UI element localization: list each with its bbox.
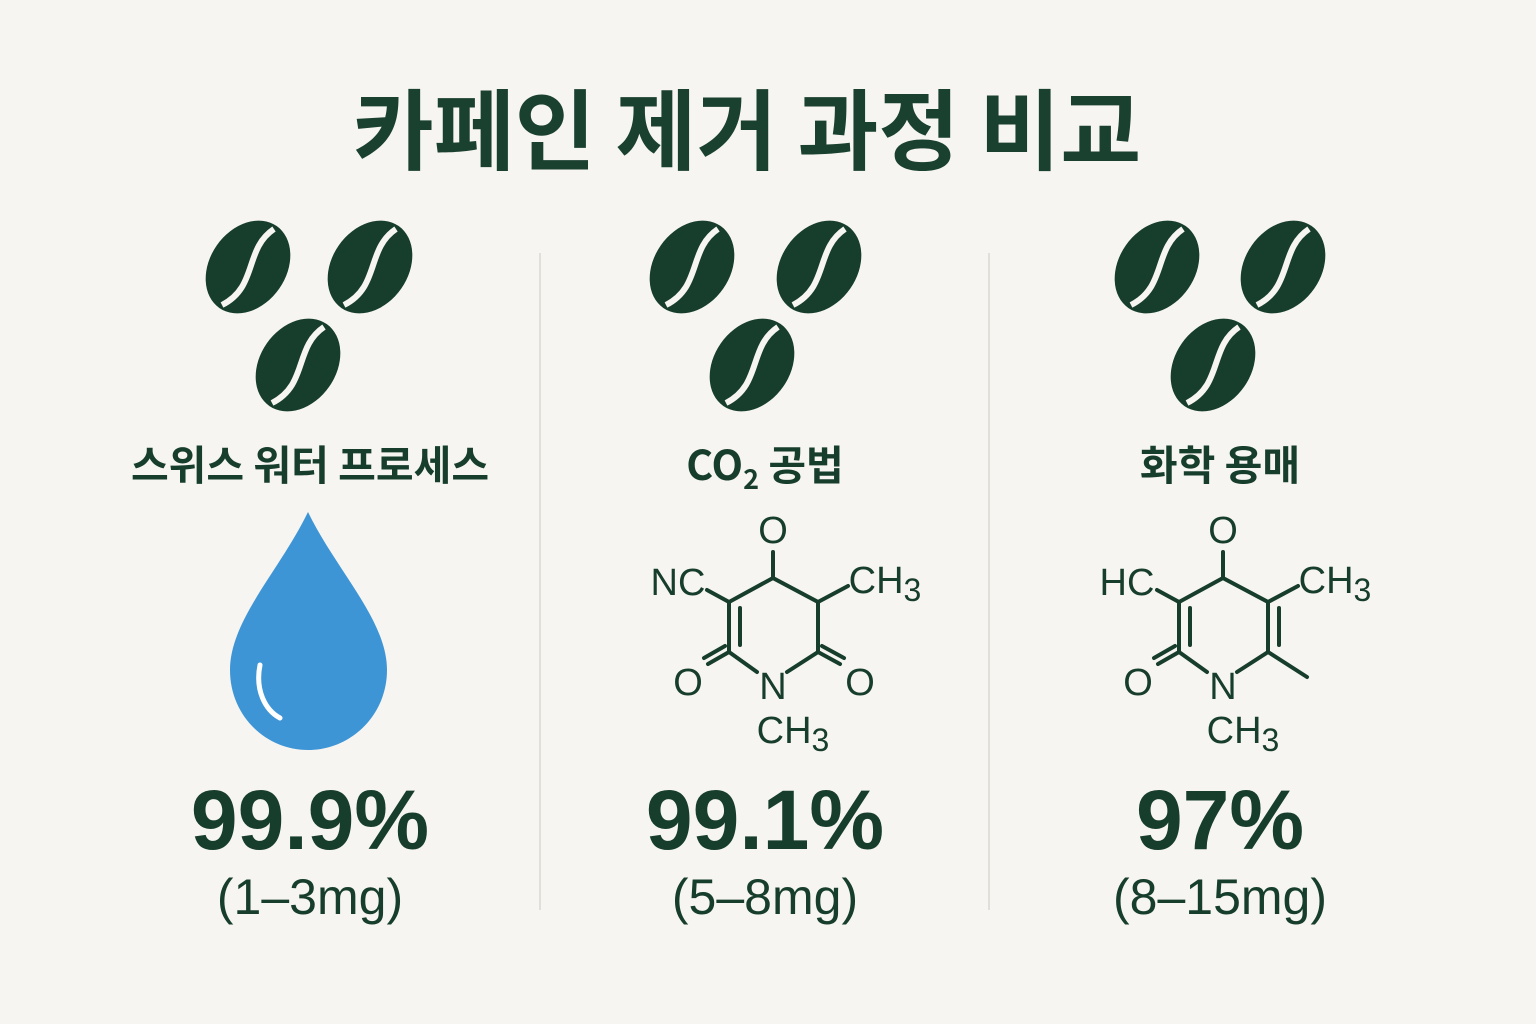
molecule: O <box>1208 510 1238 552</box>
molecule: NC <box>651 562 705 604</box>
molecule: HC <box>1100 562 1154 604</box>
mg range: (5–8mg) <box>672 869 858 925</box>
icon: water drop <box>230 512 387 750</box>
icon: beans <box>1114 220 1326 412</box>
molecule: CH <box>757 710 812 752</box>
percent: 99.9% <box>191 773 429 867</box>
icon: beans <box>206 220 412 412</box>
molecule: 3 <box>1262 722 1279 758</box>
title: 카페인 제거 과정 비교 <box>353 62 1141 189</box>
molecule: CH <box>849 560 904 602</box>
molecule: 3 <box>904 572 921 608</box>
molecule <box>1100 510 1371 758</box>
mg range: (8–15mg) <box>1113 869 1327 925</box>
molecule: CH <box>1299 560 1354 602</box>
panel: swiss water <box>131 220 489 925</box>
molecule: 3 <box>812 722 829 758</box>
label: CO2 공법 <box>686 432 844 497</box>
molecule: O <box>673 662 703 704</box>
label: 스위스 워터 프로세스 <box>131 432 489 492</box>
molecule <box>651 510 921 758</box>
percent: 99.1% <box>646 773 884 867</box>
molecule: 3 <box>1354 572 1371 608</box>
molecule: CH <box>1207 710 1262 752</box>
molecule: O <box>1123 662 1153 704</box>
mg range: (1–3mg) <box>217 869 403 925</box>
molecule: N <box>1209 666 1237 708</box>
panel: CO2 <box>646 220 921 925</box>
molecule: O <box>758 510 788 552</box>
percent: 97% <box>1136 773 1304 867</box>
label: 화학 용매 <box>1140 432 1300 492</box>
icon: beans <box>650 220 862 412</box>
molecule: N <box>759 666 787 708</box>
panel: chemical solvent <box>1100 220 1371 925</box>
molecule: O <box>845 662 875 704</box>
